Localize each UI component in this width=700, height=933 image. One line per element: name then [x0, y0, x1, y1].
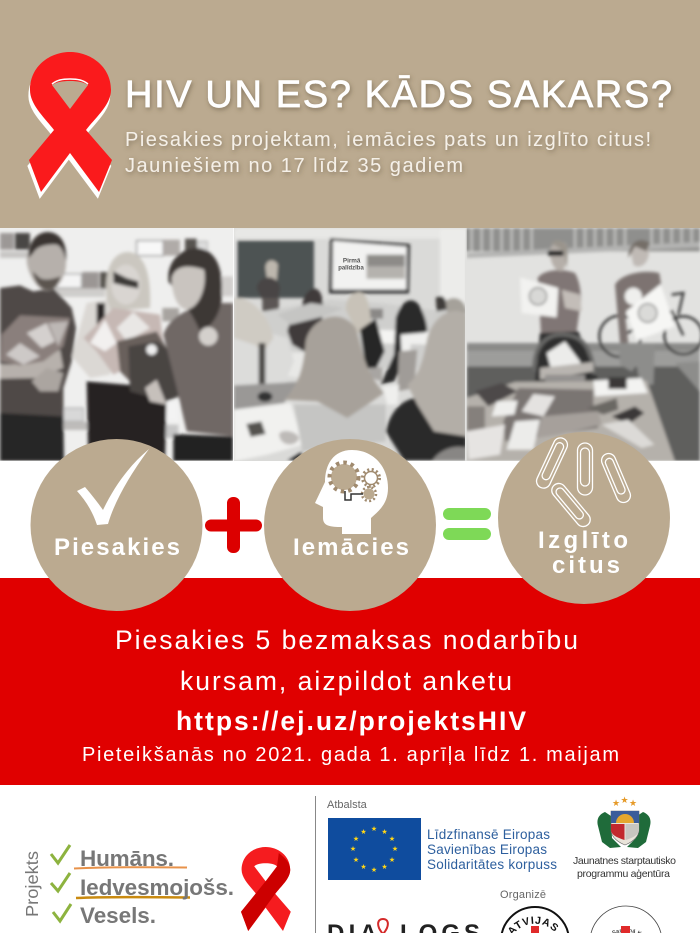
- slide caption: Pirmā: [343, 257, 361, 264]
- text: EU Solidarity Corps: Solidaritātes korpuss: [427, 857, 557, 872]
- photo: classroom lecture: [234, 228, 467, 461]
- step 2 label: Iemācies: [293, 534, 409, 561]
- header panel background: [0, 0, 700, 228]
- icon: red ribbon: [28, 52, 112, 198]
- underlines: [74, 867, 187, 868]
- slide caption: palīdzība: [338, 266, 364, 272]
- photo: outdoor information stand: [465, 228, 700, 461]
- footer: project slogan: Projekts: [22, 851, 42, 917]
- photo: volunteers with brochures: [0, 228, 233, 461]
- icon: head with gears: [315, 450, 388, 534]
- logo: Latvian coat of arms: ★: [629, 799, 637, 809]
- icon: check mark: [77, 449, 149, 525]
- step 3 label: Izglīto: [538, 527, 628, 554]
- subtitle: Jauniešiem no 17 līdz 35 gadiem: [125, 155, 463, 177]
- icon: equals: [443, 508, 491, 540]
- text: EU Solidarity Corps: Savienības Eiropas: [427, 842, 547, 857]
- step 1 circle: Piesakies: [30, 439, 202, 611]
- call-to-action text: Piesakies 5 bezmaksas nodarbību: [115, 625, 578, 655]
- logo: EU flag: ★: [360, 828, 367, 836]
- logo: EU flag: ★: [389, 835, 395, 843]
- logo: EU flag: ★: [392, 845, 398, 853]
- logo: EU flag: ★: [353, 835, 359, 843]
- red call-to-action panel: [0, 578, 700, 785]
- icon: small red ribbon: [241, 847, 291, 931]
- step 2 circle: Iemācies: [264, 439, 436, 611]
- text: youth agency: Jaunatnes starptautisko: [573, 855, 676, 867]
- label: Organizē: Organizē: [500, 889, 546, 901]
- application dates: Pieteikšanās no 2021. gada 1. aprīļa līdz 1. maijam: [82, 744, 619, 766]
- logo: EU flag: ★: [350, 845, 356, 853]
- title: HIV UN ES? KĀDS SAKARS?: [125, 74, 672, 116]
- logo: EU flag: ★: [371, 825, 377, 833]
- call-to-action text: kursam, aizpildot anketu: [180, 666, 512, 696]
- call-to-action text: [82, 625, 619, 766]
- subtitle: [125, 129, 651, 177]
- logo: Dialogs: [327, 919, 480, 933]
- icon: plus: [205, 497, 262, 553]
- icon: green check marks: [51, 845, 71, 921]
- logo: EU flag: ★: [381, 863, 388, 871]
- logo: EU flag: ★: [360, 863, 367, 871]
- footer divider: [315, 796, 316, 933]
- step 1 label: Piesakies: [54, 534, 180, 561]
- text: EU Solidarity Corps: [427, 827, 557, 872]
- logo: EU flag: ★: [389, 856, 395, 864]
- text: youth agency: programmu aģentūra: [577, 867, 670, 880]
- footer: project slogan: Vesels.: [80, 903, 156, 928]
- step 3 circle: Izglīto citus: [498, 432, 670, 604]
- step 3 label: citus: [552, 552, 620, 579]
- slide caption: [338, 257, 364, 272]
- subtitle: Piesakies projektam, iemācies pats un izglīto citus!: [125, 129, 651, 151]
- white band: [0, 461, 700, 578]
- step 3 label: [538, 527, 628, 579]
- registration URL: https://ej.uz/projektsHIV: [176, 706, 526, 736]
- logo: EU flag: [328, 818, 421, 880]
- logo: EU flag: ★: [381, 828, 388, 836]
- logo: EU flag: ★: [353, 856, 359, 864]
- icon: paper clips: [534, 436, 633, 529]
- footer: project slogan: Iedvesmojošs.: [80, 875, 234, 900]
- text: youth agency: [573, 855, 676, 880]
- footer: project slogan: [22, 845, 234, 928]
- logo: Latvian coat of arms: ★: [620, 796, 629, 806]
- logo: EU flag: ★: [371, 866, 377, 874]
- label: Atbalsta: Atbalsta: [327, 799, 368, 811]
- logo: Latvian coat of arms: [597, 796, 651, 848]
- footer: project slogan: Humāns.: [80, 846, 174, 871]
- logo: Latvian Red Cross: [500, 906, 570, 933]
- logo: Latvian coat of arms: ★: [612, 799, 620, 809]
- text: EU Solidarity Corps: Līdzfinansē Eiropas: [427, 827, 550, 842]
